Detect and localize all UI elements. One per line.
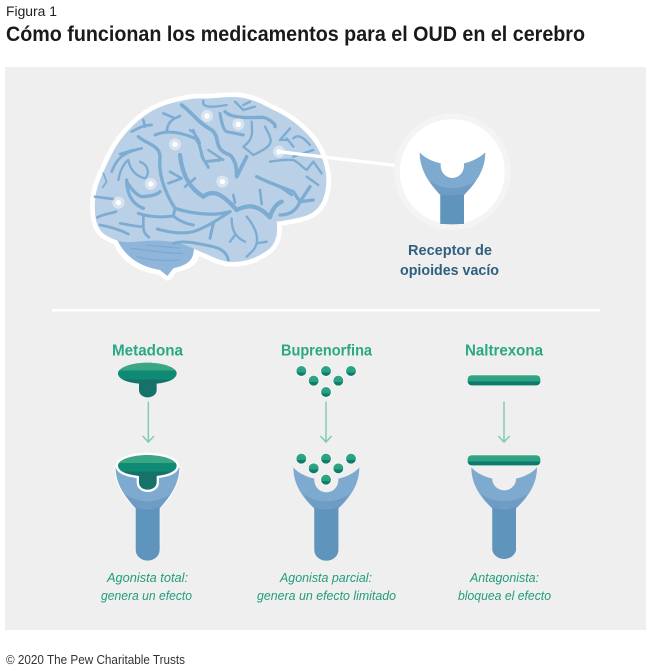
receptor with naltrexone [467,455,541,559]
arrow [498,402,510,442]
icon: empty opioid receptor [397,116,508,227]
footer credit: © 2020 The Pew Charitable Trusts [6,653,185,667]
receptor with methadone [115,455,180,561]
figure label: Figura 1 [6,3,57,19]
receptor label [400,242,499,279]
brain white outline [95,97,326,276]
receptor bowl [420,152,485,224]
caption [458,570,551,603]
icon: methadone molecule [118,363,177,397]
caption: Agonista total: [106,570,188,585]
connector line [279,152,400,166]
brain illustration [95,97,400,276]
receptor shade [430,182,475,195]
receptor label: Receptor de [408,242,492,259]
brain sulci [95,101,322,260]
caption: Antagonista: [469,570,539,585]
title: Cómo funcionan los medicamentos para el OUD en el cerebro [6,22,585,46]
heading: Metadona: Metadona [112,342,183,360]
column: Naltrexona [458,342,551,603]
caption: genera un efecto [101,588,192,603]
caption [101,570,192,603]
icon: naltrexone bar [467,375,541,386]
heading: Naltrexona: Naltrexona [465,342,543,360]
column: Buprenorfina [257,342,396,603]
arrow [320,402,332,442]
arrow [143,402,154,442]
icon: buprenorphine dots [296,366,356,397]
column: Metadona [101,342,192,603]
cerebrum [95,97,326,262]
cerebellum [117,239,194,276]
caption: Agonista parcial: [279,570,372,585]
caption [257,570,396,603]
receptor with buprenorphine [293,453,359,561]
heading: Buprenorfina: Buprenorfina [281,342,372,360]
caption: genera un efecto limitado [257,588,396,603]
caption: bloquea el efecto [458,588,551,603]
divider [52,309,600,312]
receptor glow spots [112,110,285,209]
receptor stem [440,194,464,224]
receptor label: opioides vacío [400,262,499,279]
receptor circle [397,116,508,227]
